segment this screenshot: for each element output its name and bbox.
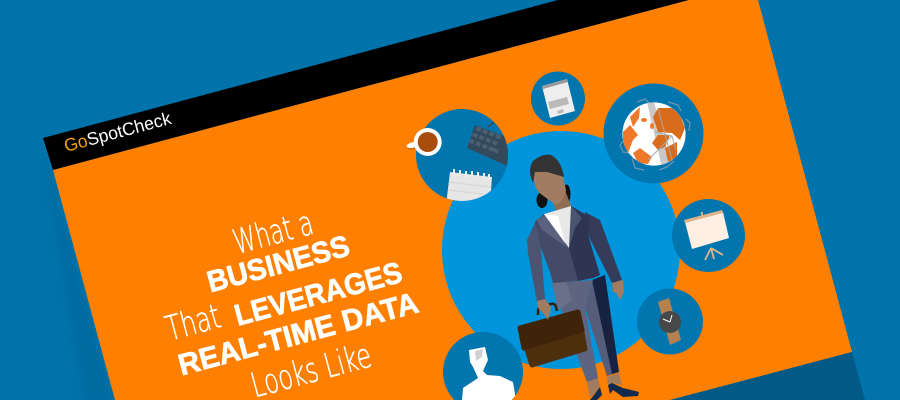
page shadow xyxy=(42,145,115,400)
headline: What a xyxy=(229,203,318,263)
right sleeve xyxy=(585,212,622,283)
headline: LEVERAGES xyxy=(231,256,406,333)
hair xyxy=(530,155,564,183)
footer band xyxy=(670,352,865,400)
icon: presentation board xyxy=(672,199,745,272)
icon: wristwatch xyxy=(637,288,703,354)
keyboard xyxy=(446,122,508,201)
businesswoman figure xyxy=(520,155,639,400)
headline xyxy=(162,203,422,400)
icon: tablet xyxy=(531,72,585,126)
headline: That xyxy=(162,297,225,349)
jacket xyxy=(535,206,600,283)
large blue circle xyxy=(442,131,680,369)
face xyxy=(534,165,566,205)
notepad xyxy=(446,172,492,201)
back hair xyxy=(536,192,548,208)
coffee cup xyxy=(406,128,442,156)
right hand xyxy=(612,280,624,300)
headline: REAL-TIME DATA xyxy=(175,287,422,382)
right leg xyxy=(585,275,619,376)
icon: person silhouette xyxy=(443,332,523,400)
left sleeve xyxy=(527,219,546,302)
headline: BUSINESS xyxy=(204,230,353,299)
left hand xyxy=(537,299,551,320)
icon: desk items xyxy=(406,109,512,205)
header band xyxy=(43,0,689,170)
shirt collar xyxy=(544,206,571,248)
logo: GoSpotCheck xyxy=(62,108,174,156)
neck xyxy=(550,190,571,216)
left leg xyxy=(552,280,598,382)
icon: globe xyxy=(604,84,704,184)
shoes and ankles xyxy=(607,373,622,385)
briefcase xyxy=(520,304,585,365)
